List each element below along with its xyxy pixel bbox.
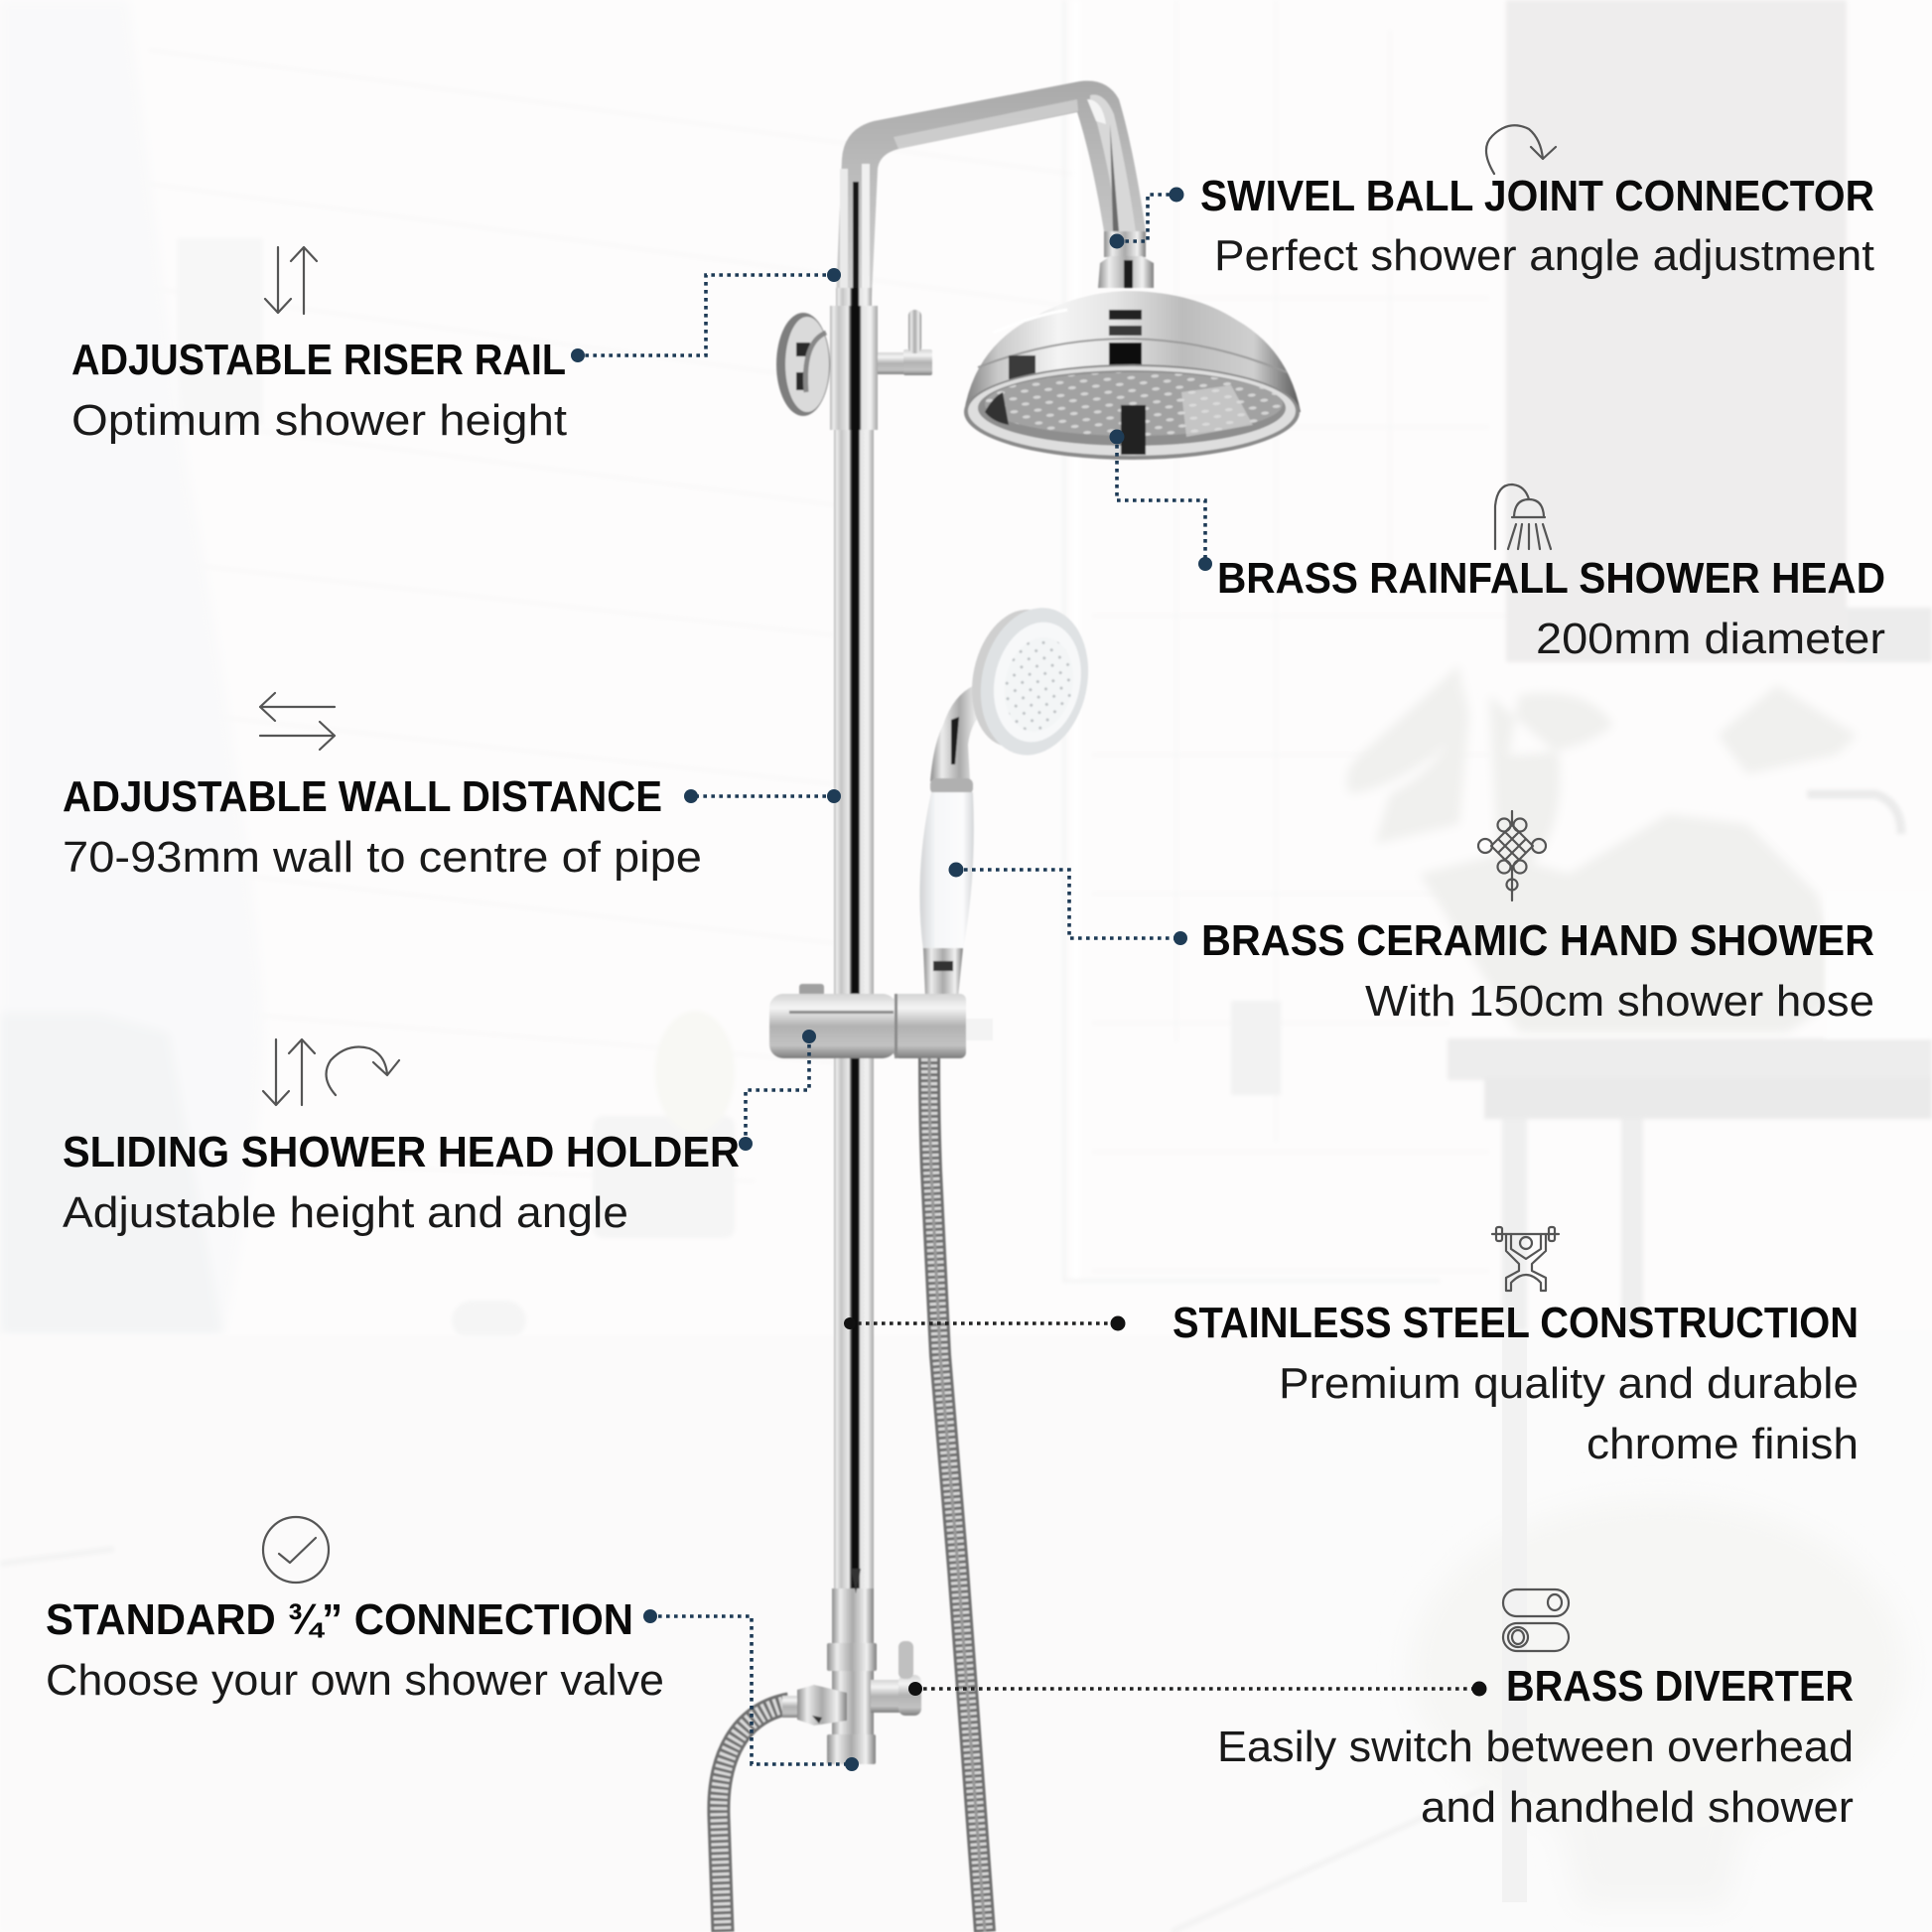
leader: swivel ball joint <box>1110 187 1183 248</box>
faucet <box>1807 794 1901 834</box>
riser rail upper <box>836 288 872 308</box>
callout: brass ceramic hand shower <box>1201 916 1874 1026</box>
sliding holder <box>769 984 993 1058</box>
heading: STANDARD ¾” CONNECTION <box>46 1595 633 1644</box>
heading: ADJUSTABLE RISER RAIL <box>71 336 566 384</box>
callout: standard 3/4 connection <box>46 1595 664 1705</box>
description: Perfect shower angle adjustment <box>1214 231 1874 280</box>
basin and bathtub <box>0 889 1932 1932</box>
description: With 150cm shower hose <box>1365 977 1874 1026</box>
heading: BRASS DIVERTER <box>1506 1662 1854 1711</box>
description: Adjustable height and angle <box>63 1188 628 1237</box>
leader: wall distance <box>684 789 841 803</box>
table <box>1448 1038 1932 1080</box>
door handle <box>1231 1001 1281 1095</box>
leader: riser rail <box>571 268 841 362</box>
glass door edge <box>1072 0 1080 1281</box>
icon: diverter toggles <box>1503 1589 1569 1651</box>
callout: stainless steel construction <box>1173 1299 1859 1468</box>
shelf objects <box>593 1116 735 1238</box>
heading: ADJUSTABLE WALL DISTANCE <box>63 772 662 821</box>
description line 1: Easily switch between overhead <box>1217 1723 1854 1771</box>
leader: brass diverter <box>908 1682 1487 1696</box>
callout: swivel ball joint connector <box>1200 172 1874 280</box>
diverter <box>782 1569 921 1764</box>
icon: check in circle (standard connection) <box>263 1517 329 1583</box>
riser rail lower <box>834 430 874 1651</box>
wall fixture <box>177 238 263 425</box>
callout: brass diverter <box>1217 1662 1854 1832</box>
callout: sliding shower head holder <box>63 1128 740 1237</box>
icon: weightlifter <box>1492 1227 1559 1291</box>
icon: arrows and rotation (sliding holder) <box>263 1039 399 1105</box>
inlet hose <box>719 1704 789 1932</box>
towel <box>0 0 264 1335</box>
heading: SLIDING SHOWER HEAD HOLDER <box>63 1128 740 1176</box>
hand shower <box>919 596 1101 998</box>
hand shower hose <box>929 1058 985 1932</box>
heading: SWIVEL BALL JOINT CONNECTOR <box>1200 172 1874 220</box>
icon: rainfall shower <box>1495 484 1551 549</box>
description: Choose your own shower valve <box>46 1656 664 1705</box>
overhead arm <box>836 80 1146 306</box>
description: 200mm diameter <box>1536 615 1885 663</box>
rainfall shower head <box>964 231 1301 460</box>
heading: STAINLESS STEEL CONSTRUCTION <box>1173 1299 1859 1347</box>
description line 2: chrome finish <box>1587 1420 1859 1468</box>
leader: sliding holder <box>739 1030 816 1151</box>
heading: BRASS RAINFALL SHOWER HEAD <box>1217 554 1885 603</box>
description: 70-93mm wall to centre of pipe <box>63 833 702 882</box>
description: Optimum shower height <box>71 396 567 445</box>
icon: endless knot <box>1478 811 1546 900</box>
grey panel top right <box>1506 0 1847 662</box>
icon: swivel arrow <box>1486 125 1556 174</box>
shower system photo <box>719 80 1301 1932</box>
leader: standard connection <box>643 1609 859 1771</box>
rail connector <box>830 306 878 430</box>
upper diverter knob <box>878 310 932 375</box>
leader: ceramic hand shower <box>949 862 1187 945</box>
callout: brass rainfall shower head <box>1217 554 1885 663</box>
callout: adjustable wall distance <box>63 772 702 882</box>
icon: left and right arrows (wall distance) <box>260 693 335 750</box>
callout: adjustable riser rail <box>71 336 567 445</box>
leader: stainless steel <box>844 1316 1126 1330</box>
wall bracket <box>776 313 830 416</box>
lower plant <box>1410 1499 1906 1906</box>
description line 2: and handheld shower <box>1421 1783 1854 1832</box>
icon: up and down arrows (riser) <box>265 247 317 314</box>
wall tile lines <box>149 0 1509 1271</box>
heading: BRASS CERAMIC HAND SHOWER <box>1201 916 1874 965</box>
description line 1: Premium quality and durable <box>1279 1359 1859 1408</box>
plant <box>1347 665 1857 1033</box>
leader: rainfall head <box>1110 429 1212 571</box>
